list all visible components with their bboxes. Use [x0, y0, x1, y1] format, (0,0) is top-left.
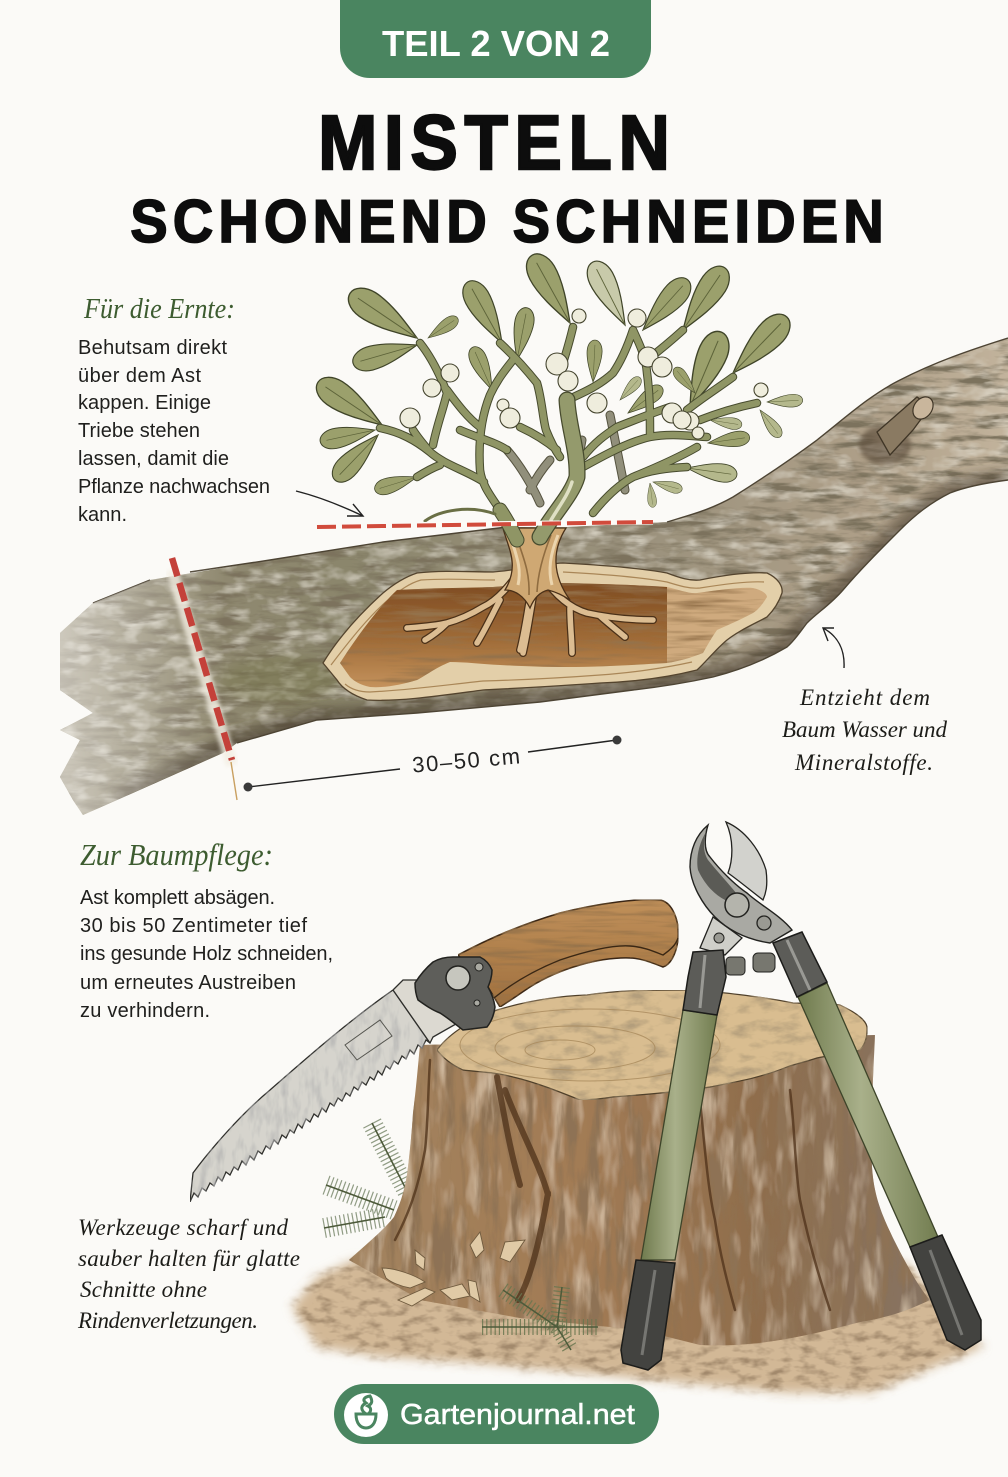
text: tree care: zu verhindern.: [80, 1000, 210, 1022]
text: harvest: Behutsam direkt: [78, 337, 227, 359]
text: harvest: Pflanze nachwachsen: [78, 476, 270, 498]
note: water and minerals: Mineralstoffe.: [794, 750, 933, 775]
heading: Für die Ernte: Für die Ernte:: [83, 294, 235, 325]
stump body: [349, 1035, 930, 1345]
illustration: mistletoe plant: [310, 248, 803, 540]
cavity inner wood: [340, 583, 667, 687]
illustration: fir sprig behind stump: [324, 1123, 408, 1228]
moss tint: [220, 656, 340, 704]
text: harvest: kappen. Einige: [78, 392, 211, 414]
dimension: 30–50 cm: [244, 736, 622, 792]
arrow: to harvest cut: [296, 491, 363, 516]
blade: [190, 990, 430, 1202]
footer badge: Gartenjournal.net: Gartenjournal.net: [400, 1399, 635, 1431]
note: water and minerals: [782, 685, 948, 775]
heading: Zur Baumpflege: Zur Baumpflege:: [80, 837, 273, 872]
note: keep tools sharp: Schnitte ohne: [80, 1277, 207, 1302]
arrow: to branch swelling: [823, 628, 844, 668]
text: harvest: Triebe stehen: [78, 420, 200, 442]
text: tree care: 30 bis 50 Zentimeter tief: [80, 915, 307, 937]
grey rear stems: [507, 415, 625, 503]
upper blade: [726, 822, 767, 900]
title: MISTELN: [318, 99, 670, 186]
branch lower shadow: [117, 480, 1008, 800]
text: harvest: lassen, damit die: [78, 448, 229, 470]
note: water and minerals: Entzieht dem: [799, 685, 930, 710]
lower tang: [700, 917, 742, 955]
note: water and minerals: Baum Wasser und: [782, 717, 948, 742]
illustration: tree branch with cut-away: [60, 338, 1008, 815]
left grip: [621, 1260, 675, 1370]
branch bark: [60, 338, 1008, 815]
text: harvest: kann.: [78, 504, 127, 526]
badge: Teil 2 von 2: [340, 0, 651, 78]
hook shade: [697, 832, 745, 905]
note: keep tools sharp: Rindenverletzungen.: [77, 1308, 258, 1333]
text: tree care: Ast komplett absägen.: [80, 887, 275, 909]
illustration: fir sprig on ground: [482, 1287, 598, 1350]
text: harvest: [78, 337, 270, 526]
right grip: [910, 1235, 981, 1350]
illustration: wood chips: [382, 1232, 525, 1306]
text: tree care: um erneutes Austreiben: [80, 972, 296, 994]
cut line: tree care: [172, 558, 237, 800]
branch stub: [859, 393, 937, 465]
text: tree care: ins gesunde Holz schneiden,: [80, 943, 333, 965]
illustration: ground: [292, 1260, 983, 1393]
note: keep tools sharp: Werkzeuge scharf und: [78, 1215, 288, 1240]
hook jaw: [690, 825, 792, 943]
branch edge lines: [93, 338, 1008, 743]
illustration: loppers: [621, 822, 981, 1370]
pale sapwood section: [667, 587, 767, 663]
illustration: tree stump: [349, 990, 930, 1345]
left handle: [641, 1010, 717, 1260]
title: [130, 99, 884, 255]
wooden handle: [458, 900, 678, 1007]
text: harvest: über dem Ast: [78, 365, 201, 387]
icon: logo: [344, 1393, 388, 1437]
bark fissures: [395, 1060, 830, 1310]
faded left end: [60, 565, 240, 815]
leaves: [310, 248, 803, 508]
title: SCHONEND SCHNEIDEN: [130, 189, 884, 255]
badge: Teil 2 von 2: TEIL 2 VON 2: [382, 23, 610, 64]
cavity rim: [323, 563, 782, 700]
stems: [380, 327, 757, 540]
metal pivot: [415, 957, 495, 1030]
rim grain: [331, 572, 764, 692]
handle lower edge: [494, 938, 678, 998]
left collar: [683, 950, 726, 1015]
illustration: folding saw: [190, 900, 678, 1202]
mistletoe roots: [407, 528, 653, 653]
right handle: [798, 983, 938, 1247]
cut line: harvest: [317, 522, 653, 527]
blade stamp: [345, 1020, 392, 1060]
footer badge: Gartenjournal.net: [334, 1384, 659, 1444]
metal neck: [393, 980, 463, 1043]
berries: [400, 309, 768, 439]
note: keep tools sharp: sauber halten für glatte: [78, 1246, 300, 1271]
stump top: [437, 990, 867, 1100]
text: tree care: [80, 887, 333, 1022]
right collar: [773, 932, 827, 997]
growth rings: [460, 1009, 720, 1081]
stops: [726, 957, 745, 975]
note: keep tools sharp: [77, 1215, 300, 1333]
dimension: 30–50 cm: 30–50 cm: [411, 743, 521, 778]
